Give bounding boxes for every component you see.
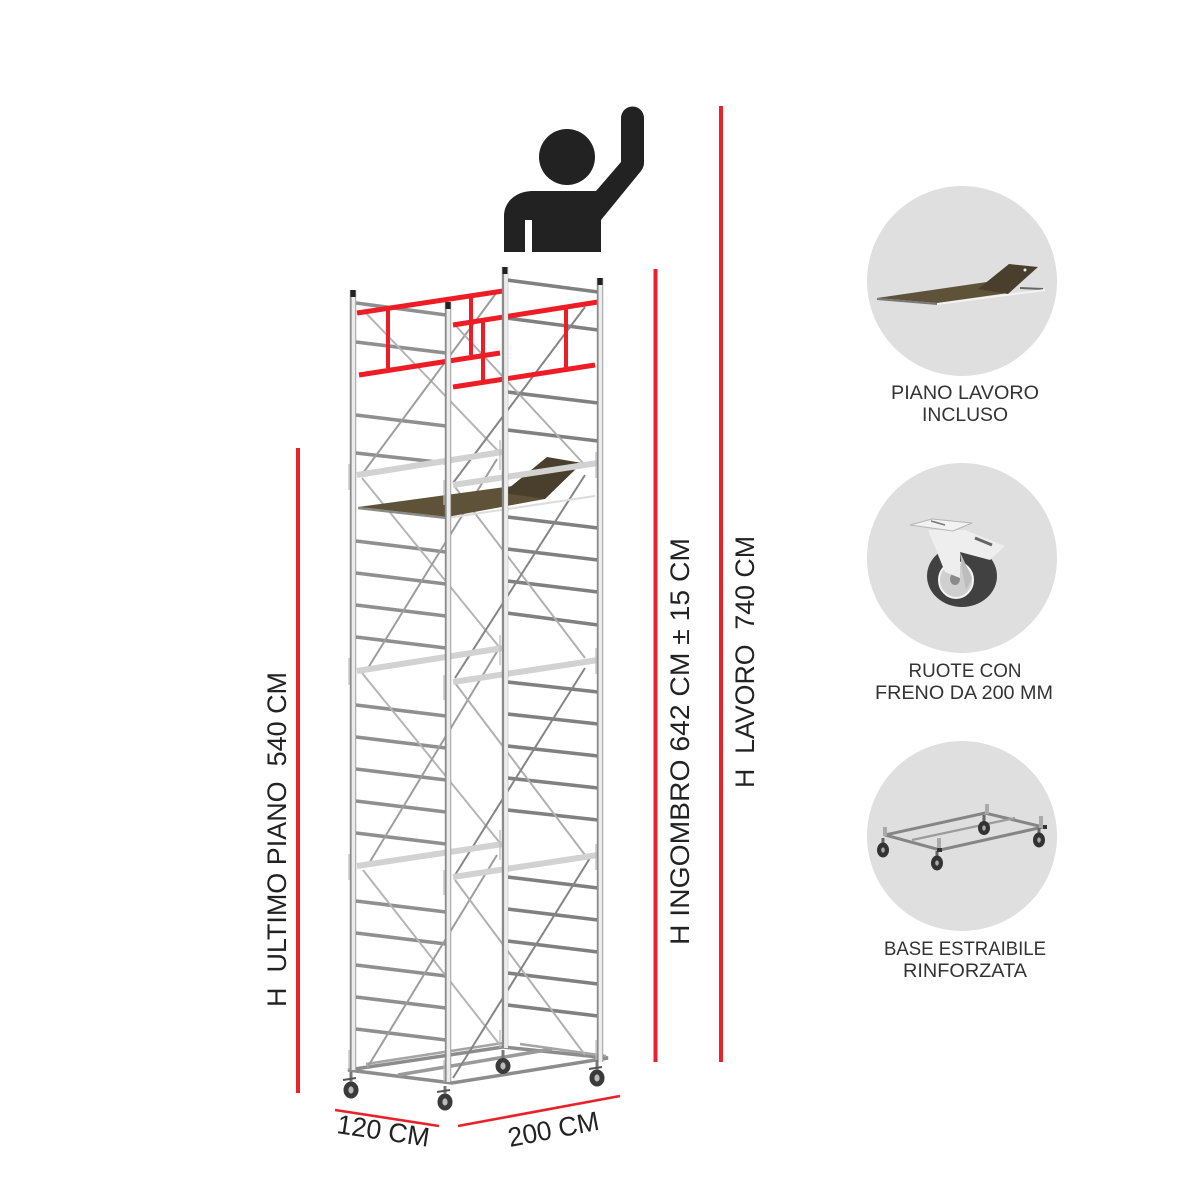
diagonal braces: right tower [453,307,590,1078]
dimension line: ingombro [654,269,658,1062]
circle background [867,186,1057,376]
dimension line: width [458,1096,620,1126]
circle background [867,741,1057,931]
dimension line: depth [335,1110,439,1126]
dimension line: ultimo piano [296,448,300,1093]
label: H lavoro: H LAVORO 740 CM [730,536,760,788]
icon: person raising arm [504,107,644,252]
horizontal braces [357,452,598,877]
panel: piano lavoro [867,186,1057,426]
work platform in tower [358,457,595,518]
rungs: right tower [507,280,598,1016]
label: RUOTE CON [908,660,1022,682]
panel: ruote [867,463,1057,704]
panel: ruote: FRENO DA 200 MM [875,682,1053,704]
panel: base: RINFORZATA [903,960,1027,982]
caster wheels [343,1050,604,1110]
red top guard rails [357,291,598,387]
label: BASE ESTRAIBILE [884,938,1046,960]
diagonal braces: left tower [362,292,500,1068]
label: H ultimo piano: H ULTIMO PIANO 540 CM [262,672,292,1007]
scaffold tower [343,267,608,1110]
rungs: left tower [356,303,446,1040]
icon: caster wheel [910,519,1005,607]
dimension line: lavoro [719,106,723,1062]
label: 120 cm: 120 CM [335,1109,432,1153]
icon: base frame [877,804,1047,870]
circle background [867,463,1057,653]
label: 200 cm: 200 CM [505,1106,601,1153]
uprights [349,267,600,1082]
panel: base [867,741,1057,982]
label: H ingombro: H INGOMBRO 642 CM ± 15 CM [665,538,695,945]
base frame [348,1043,608,1083]
icon: platform [877,264,1045,304]
label: PIANO LAVORO [891,382,1039,404]
panel: piano lavoro: INCLUSO [922,404,1008,426]
